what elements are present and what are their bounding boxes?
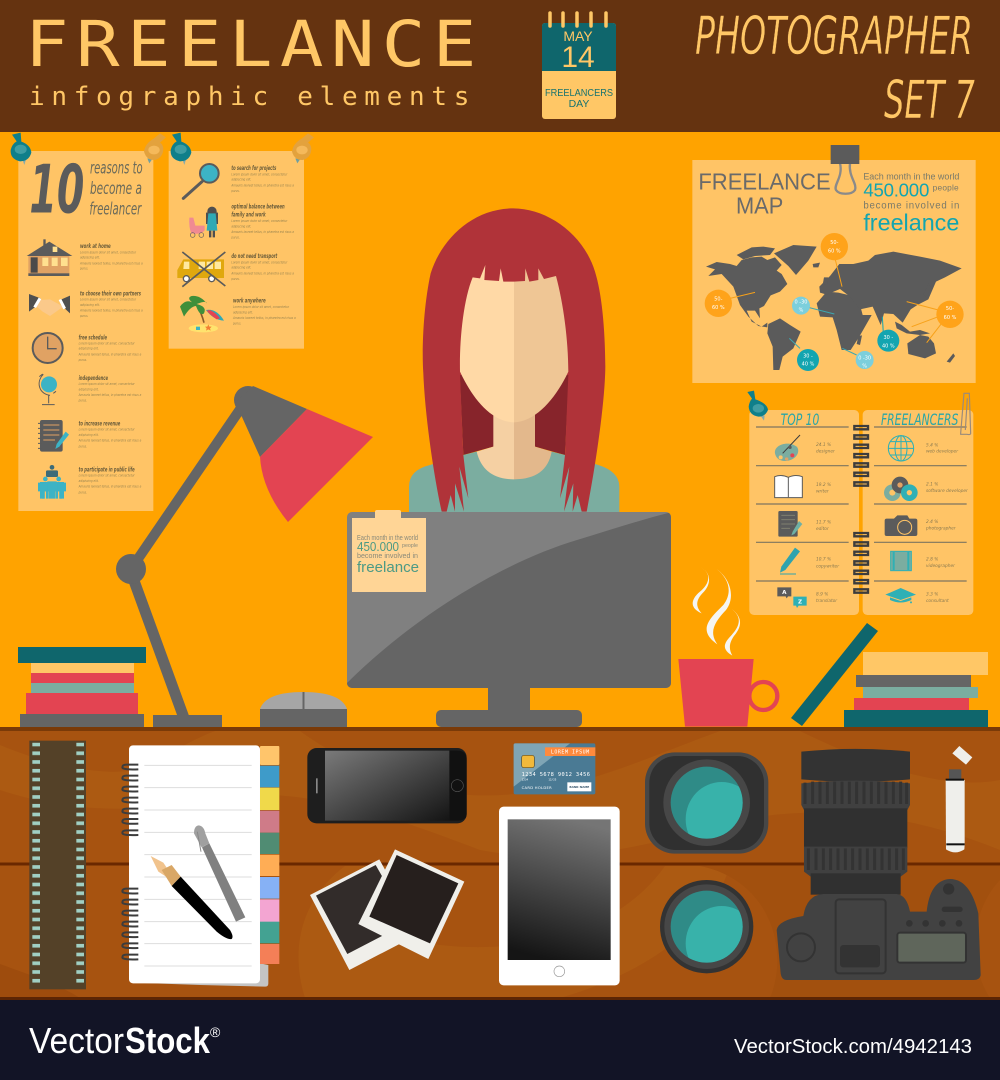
reason: increase revenue: Amauris laoreet tellus, in pharetra est risus a (78, 439, 141, 443)
reason: work at home: purus. (79, 267, 88, 271)
reason: increase revenue: adipiscing elit. (79, 433, 99, 437)
callout: 450.000 people (863, 171, 959, 236)
poster heading: become a (90, 179, 142, 198)
map stat circles: 40 % (882, 343, 895, 349)
stat: web developer: web developer (926, 449, 958, 455)
callout: 450.000 people: become involved in (863, 200, 959, 211)
round lens (660, 880, 754, 974)
big number 10: 10 (29, 151, 84, 229)
polaroid photos (310, 849, 464, 970)
credit card: 1234 5678 9012 3456 (522, 772, 590, 778)
reason: search for projects: Amauris laoreet tellus, in pharetra est risus a (231, 183, 294, 187)
reason: independence: purus. (78, 399, 87, 403)
stat: photographer: photographer (925, 525, 956, 531)
sticky note: Each month in the world (357, 533, 418, 542)
stat: editor: editor (816, 526, 829, 532)
reason: increase revenue: Lorem ipsum dolor sit amet, consectetur (79, 428, 135, 432)
calendar icon: DAY (569, 98, 589, 110)
map leader lines (730, 258, 942, 355)
reason: free schedule: Lorem ipsum dolor sit amet, consectetur (79, 341, 135, 345)
map stat circles (705, 233, 964, 371)
poster heading: freelancer (89, 199, 142, 218)
panel: freelance map (692, 145, 976, 383)
spiral binding (854, 426, 868, 593)
stat: videographer: 2.8 % (926, 557, 938, 563)
reason: balance family and work: Lorem ipsum dolor sit amet, consectetur (231, 219, 288, 223)
stat: consultant: 3.3 % (926, 592, 938, 598)
fountain pen (151, 856, 233, 939)
reason: work anywhere: adipiscing elit. (233, 310, 253, 314)
stat: translator: A (782, 590, 787, 596)
stat: designer: 24.1 % (816, 442, 831, 448)
reason: independence: Amauris laoreet tellus, in pharetra est risus a (78, 393, 141, 397)
credit card (514, 743, 595, 794)
credit card: CARD HOLDER (522, 786, 552, 790)
stat: web developer: 5.4 % (926, 442, 938, 448)
reason: no transport: Lorem ipsum dolor sit amet, consectetur (231, 260, 288, 264)
callout: 450.000 people: 450.000 (863, 180, 929, 201)
stat: designer: designer (816, 449, 835, 455)
notebook (122, 745, 279, 987)
map stat circles: 40 % (802, 362, 815, 368)
reason: free schedule: purus. (78, 358, 87, 362)
calendar icon: FREELANCERS (545, 87, 613, 99)
reason: balance family and work (189, 203, 294, 240)
reason: work anywhere: purus. (232, 322, 241, 326)
reason: no transport: purus. (231, 277, 240, 281)
background wall (0, 132, 1000, 732)
callout: 450.000 people: people (933, 183, 959, 193)
stat: software developer: 2.1 % (926, 482, 938, 488)
reason: balance family and work: Amauris laoreet tellus, in pharetra est risus a (231, 230, 294, 234)
stat: web developer (888, 436, 958, 461)
reason: work anywhere: Lorem ipsum dolor sit amet, consectetur (233, 305, 289, 309)
computer monitor (344, 510, 672, 727)
panel: reasons continued poster (169, 151, 304, 349)
reason: work at home: Amauris laoreet tellus, in pharetra est risus a (79, 261, 143, 265)
stat: designer (775, 435, 835, 461)
film strip (29, 741, 86, 989)
stat: translator: Z (798, 599, 802, 605)
calendar icon (542, 13, 616, 119)
image id: VectorStock.com/4942143 (734, 1036, 972, 1058)
reason: free schedule: Amauris laoreet tellus, in pharetra est risus a (78, 352, 141, 356)
logo: stock bold: Stock (125, 1020, 211, 1061)
map stat circles: 60 % (944, 315, 957, 321)
footer band (0, 1000, 1000, 1080)
face (460, 265, 568, 422)
reason: no transport (177, 252, 294, 287)
panel: top 10 freelancers notebook (747, 391, 973, 615)
computer mouse (260, 692, 347, 727)
reason: independence: independence (79, 375, 108, 382)
map stat circles: 0 -30 (795, 300, 807, 306)
subtitle: infographic elements (29, 82, 476, 112)
desk items left (29, 741, 467, 989)
reason: public life (38, 465, 141, 499)
reason: work at home: work at home (80, 243, 111, 250)
sticky note: 450.000 (357, 540, 399, 554)
stat: software developer: software developer (926, 488, 968, 494)
reason: increase revenue: purus. (78, 444, 87, 448)
icon: orange pin right (292, 133, 314, 163)
map stat circles: 60 % (828, 248, 841, 254)
book stack right (844, 652, 988, 727)
poster heading: reasons to (90, 158, 143, 177)
credit card: LOREM IPSUM (551, 750, 589, 756)
reason: partners: Amauris laoreet tellus, in pharetra est risus a (79, 309, 143, 313)
lens hood front (645, 752, 768, 857)
panel: 10 reasons poster (18, 151, 153, 511)
icon: binder clip (831, 145, 859, 194)
desk lamp (116, 386, 373, 727)
reason: increase revenue: to increase revenue (79, 421, 120, 428)
smartphone (307, 748, 467, 823)
reason: work anywhere: work anywhere (233, 298, 266, 305)
stat: editor (778, 511, 831, 537)
map heading: FREELANCE (698, 168, 831, 194)
sticky note: people (402, 543, 418, 549)
reason: free schedule: adipiscing elit. (79, 347, 99, 351)
reason: balance family and work: adipiscing elit. (231, 224, 251, 228)
reason: partners: adipiscing elit. (80, 303, 100, 307)
coffee cup with steam (678, 567, 777, 727)
reason: balance family and work: optimal balance between (231, 203, 285, 210)
icon: teal pin middle (171, 133, 191, 165)
poster heading (89, 158, 143, 218)
map stat circles: 60 % (712, 305, 725, 311)
reason: free schedule (33, 333, 141, 363)
desk items right (499, 743, 981, 985)
stat: consultant (885, 588, 949, 604)
front hair (423, 208, 605, 512)
map stat circles: 30 - (803, 353, 813, 359)
reason: partners: purus. (79, 314, 88, 318)
stat: translator: 8.9 % (816, 591, 828, 597)
back hair (459, 367, 569, 455)
book stack left (18, 647, 146, 727)
map stat circles: % (799, 308, 804, 314)
header band (0, 0, 1000, 132)
callout: 450.000 people: Each month in the world (863, 171, 959, 181)
stat: consultant: consultant (926, 598, 949, 604)
reason: no transport: adipiscing elit. (231, 266, 251, 270)
stat: writer: 19.2 % (816, 482, 831, 488)
shirt (409, 452, 619, 513)
reason: work anywhere (180, 296, 296, 332)
stat: copywriter (780, 548, 839, 574)
notebook heading: TOP 10 (781, 410, 819, 429)
reason: work at home (27, 239, 143, 276)
sticky note: freelance (357, 559, 419, 576)
calendar icon: MAY (563, 28, 593, 44)
credit card: 1234 (522, 777, 528, 781)
map stat circles: 50- (830, 240, 839, 246)
logo: vectorstock: Vector (29, 1020, 124, 1061)
sticky note: become involved in (357, 551, 418, 560)
map stat circles: % (862, 363, 867, 369)
stat: photographer: 2.4 % (926, 519, 938, 525)
stat: writer: writer (816, 489, 829, 495)
neck (477, 413, 552, 479)
icon: paper clip (961, 393, 971, 435)
reason: search for projects: adipiscing elit. (231, 178, 251, 182)
reason: search for projects: to search for projects (231, 165, 277, 172)
logo: registered mark: ® (210, 1024, 221, 1040)
credit card: 12/25 (548, 777, 557, 781)
reason: public life: to participate in public life (79, 466, 135, 473)
world map (706, 245, 962, 370)
figure: woman at computer (409, 208, 619, 513)
stat: videographer (891, 551, 955, 571)
map stat circles: 0 -30 (858, 355, 871, 361)
stat: writer (775, 475, 831, 498)
reason: public life: purus. (78, 490, 87, 494)
stat: translator: translator (816, 598, 837, 604)
reason: balance family and work: family and work (231, 212, 266, 219)
reason: public life: Lorem ipsum dolor sit amet, consectetur (79, 474, 135, 478)
reason: balance family and work: purus. (231, 236, 240, 240)
reason: partners: Lorem ipsum dolor sit amet, consectetur (80, 298, 136, 302)
callout: 450.000 people: freelance (863, 210, 959, 236)
stat: translator (777, 587, 837, 608)
reason: free schedule: free schedule (79, 334, 107, 341)
map stat circles: 30 - (883, 335, 893, 341)
credit card: BANK NAME (569, 785, 589, 789)
reason: partners (29, 290, 143, 318)
reason: independence: Lorem ipsum dolor sit amet, consectetur (79, 382, 135, 386)
stat: photographer (885, 515, 956, 536)
icon: teal pin on notebook (747, 391, 768, 421)
stat: copywriter: copywriter (816, 563, 839, 569)
reason: increase revenue (38, 420, 141, 452)
calendar icon: 14 (561, 41, 595, 74)
reason: independence: adipiscing elit. (79, 387, 99, 391)
notebook heading right: FREELANCERS (881, 410, 958, 429)
icon: orange pin left (144, 133, 166, 163)
reason: no transport: Amauris laoreet tellus, in pharetra est risus a (231, 271, 294, 275)
reason: no transport: do not need transport (231, 253, 278, 260)
leaning book (791, 623, 878, 726)
stat: software developer (884, 477, 968, 501)
usb flash drive (946, 746, 972, 852)
map stat circles: 50- (946, 306, 954, 312)
map heading: MAP (736, 192, 783, 218)
reason: partners: to choose their own partners (80, 290, 141, 297)
camera with zoom lens (777, 749, 981, 980)
reason: independence (39, 374, 141, 405)
stat: copywriter: 10.7 % (816, 557, 831, 563)
stat: editor: 11.7 % (816, 519, 831, 525)
wooden desk (0, 727, 1000, 1000)
reason: work at home: Lorem ipsum dolor sit amet, consectetur (80, 250, 136, 254)
reason: work anywhere: Amauris laoreet tellus, in pharetra est risus a (232, 316, 296, 320)
icon: teal pin left (11, 133, 31, 165)
reason: search for projects: Lorem ipsum dolor sit amet, consectetur (231, 172, 288, 176)
reason: public life: Amauris laoreet tellus, in pharetra est risus a (78, 485, 141, 489)
title: freelance: FREELANCE (25, 8, 484, 82)
reason: search for projects (183, 164, 294, 198)
reason: public life: adipiscing elit. (79, 479, 99, 483)
sticky note (352, 510, 426, 592)
ballpoint pen (194, 825, 245, 922)
map heading (698, 168, 831, 218)
map stat circles: 50- (714, 297, 723, 303)
reason: work at home: adipiscing elit. (80, 256, 100, 260)
stat: videographer: videographer (926, 563, 955, 569)
tablet (499, 807, 620, 985)
reason: search for projects: purus. (231, 189, 240, 193)
